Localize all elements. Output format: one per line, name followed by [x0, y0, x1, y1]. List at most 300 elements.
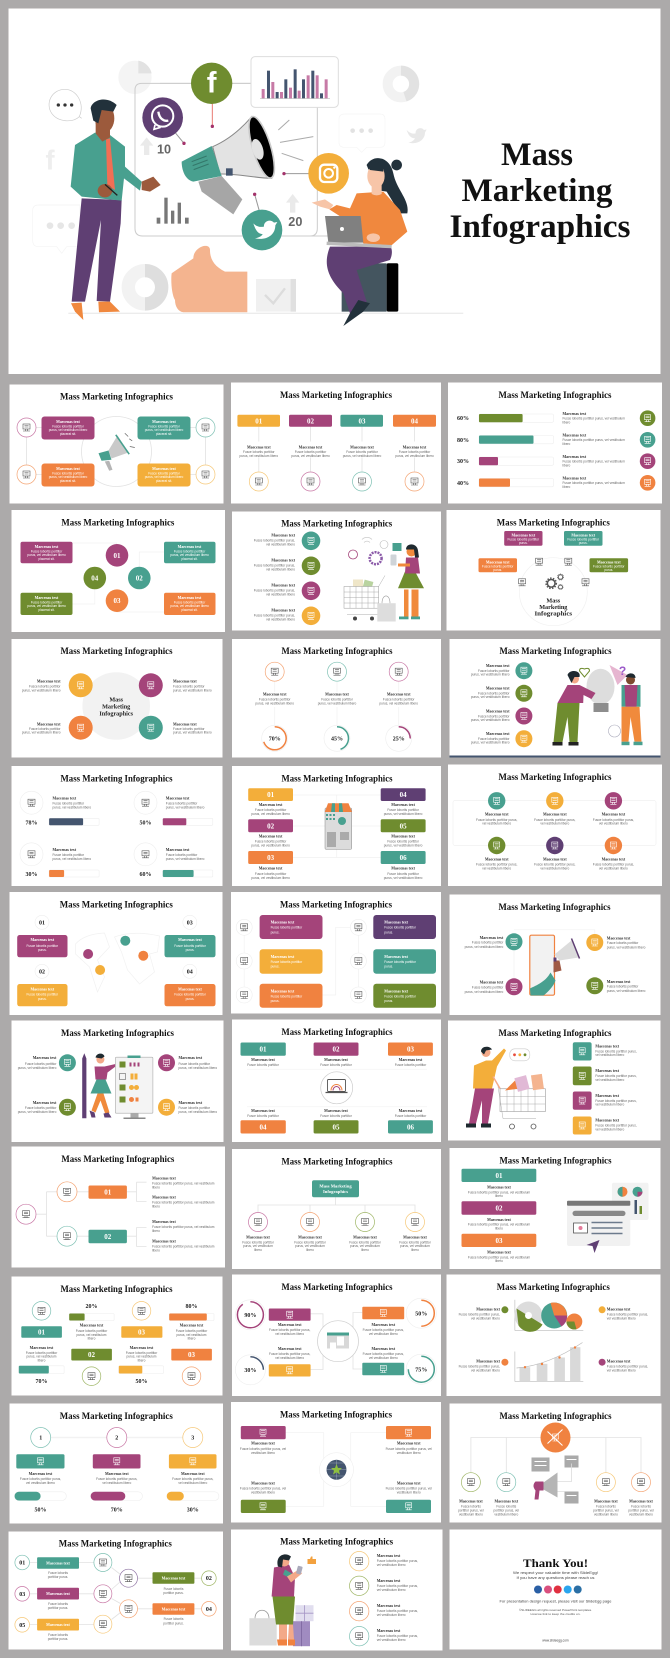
box: top left: Maecenas text [56, 420, 81, 424]
message [513, 1570, 598, 1580]
box 02: Fusce lobortis porttitor [255, 840, 287, 844]
header 05: Fusce lobortis porttitor [320, 1114, 353, 1118]
hub circle: Marketing [102, 704, 131, 710]
block 01: Maecenas text [487, 1185, 512, 1189]
list item 3 [573, 1092, 637, 1110]
item 5 [534, 837, 576, 870]
column 70%: 70% [269, 736, 281, 742]
item 50% [134, 791, 213, 826]
box 01: Maecenas text [259, 803, 283, 807]
panel: slide 6 gears [446, 510, 660, 630]
box 04: Fusce lobortis porttitor [387, 808, 420, 812]
item 75% [362, 1347, 436, 1384]
item 01: Fusce lobortis porttitor [27, 944, 59, 948]
text 3: Maecenas text [152, 1220, 176, 1224]
item left top: Fusce lobortis porttitor [25, 1062, 57, 1066]
heading: Mass Marketing Infographics [280, 900, 392, 911]
item 6 [593, 837, 634, 870]
heading: Mass Marketing Infographics [282, 1282, 393, 1293]
step 1: Maecenas text [29, 1472, 53, 1476]
block 02: 02 [496, 1205, 503, 1213]
text bottom left: Maecenas text [37, 722, 61, 726]
item 90% [235, 1300, 311, 1336]
text 4 [152, 1240, 215, 1252]
item 90%: 90% [244, 1313, 256, 1319]
item top left: Fusce lobortis porttitor purus, [459, 1312, 500, 1316]
list item 2: purus, vel vestibulum libero [471, 695, 510, 699]
hero title: Marketing [462, 173, 613, 209]
column 02: 20% [86, 1304, 98, 1310]
list item 4: Fusce lobortis porttitor purus, [377, 1634, 418, 1638]
item right bottom: purus, vel vestibulum libero [178, 1110, 217, 1114]
node 2: vestibulum libero [494, 1512, 518, 1516]
row 40% [457, 475, 655, 491]
box: top left: purus, vel vestibulum libero [49, 428, 88, 432]
item circles [69, 673, 163, 740]
item right top: Fusce lobortis porttitor [178, 1062, 211, 1066]
item 03: purus. [186, 948, 195, 952]
box 01: purus, vel vestibulum libero [251, 812, 290, 816]
item 78%: Fusce lobortis porttitor [52, 801, 85, 805]
heading: Mass Marketing Infographics [61, 1154, 175, 1165]
text 3 [152, 1220, 215, 1233]
center label: Marketing [539, 604, 568, 611]
item right bottom: purus, vel vestibulum libero [607, 989, 646, 993]
list item 3 [350, 1602, 418, 1621]
box: bottom right: Fusce lobortis porttitor [174, 600, 206, 604]
node 2: Maecenas text [494, 1500, 519, 1504]
item right top: purus, vel vestibulum libero [178, 1066, 217, 1070]
box 06: Maecenas text [391, 867, 416, 871]
column 45%: Fusce lobortis porttitor [321, 697, 354, 701]
header 06: 06 [407, 1124, 414, 1132]
block 02 [462, 1201, 536, 1230]
column 03: 03 [138, 1328, 146, 1336]
row 30%: Maecenas text [562, 455, 587, 459]
box: top right [164, 542, 216, 563]
item top right [599, 1306, 648, 1320]
list item 2 [254, 556, 320, 575]
row 40%: libero [562, 485, 571, 489]
list item 1: Maecenas text [486, 664, 510, 668]
social icons [534, 1586, 582, 1594]
box: bottom right: purus, vel vestibulum libero [170, 604, 209, 608]
column 01: purus, vel vestibulum libero [239, 454, 278, 458]
step 1: 50% [34, 1508, 46, 1514]
node 3: purus, vel vestibulum [350, 1244, 380, 1248]
boxes: Fusce lobortis porttitor [508, 538, 540, 542]
panel: slide 14 six boxes [231, 892, 441, 1014]
heading: Mass Marketing Infographics [60, 1284, 173, 1295]
box 3 [478, 558, 517, 572]
list item 2: vel vestibulum libero [377, 1588, 406, 1592]
column 03: purus, vel vestibulum [127, 1354, 157, 1358]
heading: Mass Marketing Infographics [498, 772, 612, 783]
item top left: Maecenas text [476, 1308, 501, 1312]
box 5: Fusce lobortis porttitor [384, 960, 417, 964]
list item 4: Maecenas text [595, 1119, 620, 1123]
legal text: ©SLIDEEGG all rights reserved PowerPoint templates. [519, 1608, 592, 1612]
pie charts [514, 1300, 583, 1332]
item 50%: 50% [140, 820, 152, 826]
panel: slide 19 tree branches [12, 1146, 225, 1268]
row 05: Fusce lobortis [48, 1633, 68, 1637]
heading: Mass Marketing Infographics [498, 1028, 612, 1039]
item 4: Fusce lobortis porttitor purus, [476, 862, 517, 866]
list item 3: Maecenas text [595, 1094, 620, 1098]
block 03: Fusce lobortis porttitor purus, vel vestibulum [468, 1255, 531, 1259]
node 3 [349, 1212, 382, 1252]
item 50%: Fusce lobortis porttitor [166, 801, 198, 805]
list item 2: Maecenas text [486, 687, 510, 691]
item 1: Maecenas text [485, 812, 509, 816]
row 01 [15, 1554, 112, 1579]
box 3: Maecenas text [271, 989, 295, 993]
node 3: Maecenas text [353, 1235, 378, 1239]
item 90%: Maecenas text [278, 1323, 302, 1327]
hub circle [82, 672, 150, 740]
box 04 [381, 788, 426, 816]
item 90%: vel vestibulum libero [275, 1332, 304, 1336]
ground line [68, 312, 463, 315]
icon: instagram circle [282, 153, 349, 194]
column 03: Maecenas text [350, 446, 375, 450]
node 1: Fusce lobortis porttitor [242, 1240, 275, 1244]
step 2: Fusce lobortis porttitor purus, [96, 1477, 138, 1481]
box 3: Fusce lobortis porttitor [271, 994, 303, 998]
item right top: purus, vel vestibulum libero [607, 946, 646, 950]
node 4: libero [411, 1248, 419, 1252]
list item 3: vel vestibulum libero [595, 1103, 625, 1107]
column 01: Maecenas text [30, 1346, 54, 1350]
heading: Mass Marketing Infographics [60, 1411, 173, 1422]
node 3: Fusce lobortis [596, 1504, 616, 1508]
node 4: vestibulum libero [629, 1512, 653, 1516]
panel: slide 2 numbered columns [231, 382, 441, 504]
item 50%: purus, vel vestibulum libero [166, 805, 205, 809]
block 01 [462, 1169, 536, 1198]
column 03: Fusce lobortis porttitor [126, 1351, 158, 1355]
box: bottom right: Fusce lobortis porttitor [148, 472, 181, 476]
row 05 [15, 1615, 112, 1641]
box bottom left: Fusce lobortis porttitor purus, vel [240, 1487, 286, 1491]
number circles: 03 [114, 597, 121, 605]
node 2 [494, 1473, 519, 1516]
step 2: 70% [111, 1508, 123, 1514]
list item 4 [471, 730, 532, 747]
item 03: Maecenas text [178, 938, 203, 942]
item 03: Fusce lobortis porttitor [174, 944, 207, 948]
box top left: Maecenas text [251, 1442, 276, 1446]
column 04: Fusce lobortis porttitor [399, 450, 431, 454]
heading: Mass Marketing Infographics [59, 1538, 172, 1550]
box top right: Maecenas text [397, 1442, 421, 1446]
item right top [586, 934, 646, 951]
column 01: libero [38, 1358, 46, 1362]
text top right: Fusce lobortis porttitor [173, 685, 205, 689]
item 75%: vel vestibulum libero [369, 1356, 398, 1360]
box 05 [381, 819, 426, 848]
check box [256, 279, 296, 312]
panel: hero slide [8, 8, 660, 374]
column 01: Fusce lobortis porttitor [26, 1351, 58, 1355]
header 01: Maecenas text [251, 1058, 276, 1062]
item 03 [164, 915, 216, 957]
list item 1: Fusce lobortis porttitor purus, [377, 1559, 418, 1563]
heading: Mass Marketing Infographics [281, 518, 392, 530]
box 3: Fusce lobortis porttitor [482, 564, 514, 568]
header 06: Maecenas text [399, 1109, 423, 1113]
heading: Mass Marketing Infographics [280, 1536, 393, 1548]
branch 01: 01 [104, 1189, 112, 1197]
box: bottom right: Maecenas text [152, 467, 177, 471]
hero illustration: chart, megaphone, woman [160, 57, 427, 326]
item 3: Fusce lobortis porttitor purus, [593, 818, 634, 822]
column 02: 02 [307, 418, 314, 426]
box top left: vestibulum libero [251, 1451, 275, 1455]
block 02: Maecenas text [487, 1218, 512, 1222]
connectors [259, 426, 414, 472]
text bottom right [173, 722, 212, 735]
item right bottom: Maecenas text [607, 980, 631, 984]
icon: pale donut top right [388, 71, 414, 97]
heading: Mass Marketing Infographics [60, 646, 173, 657]
item 1: Fusce lobortis porttitor purus, [476, 818, 517, 822]
hub circle: Mass [109, 697, 124, 704]
node 4: Fusce lobortis porttitor [399, 1240, 432, 1244]
box 04: 04 [400, 791, 407, 799]
center label: Infographics [535, 610, 573, 618]
item 5: Maecenas text [543, 858, 567, 862]
item left bottom: Fusce lobortis porttitor [25, 1106, 57, 1110]
text bottom left: purus, vel vestibulum libero [22, 731, 61, 735]
box 06: purus, vel vestibulum libero [384, 876, 423, 880]
node 1 [458, 1473, 484, 1516]
box 2 [236, 949, 322, 974]
icon: up arrow with 10: 10 [157, 143, 171, 157]
list item 3: Maecenas text [486, 709, 510, 713]
list item 4: Maecenas text [486, 732, 510, 736]
item 04: Fusce lobortis porttitor [174, 992, 207, 996]
text 2: Maecenas text [152, 1196, 176, 1200]
row 03: porttitor purus. [48, 1606, 68, 1610]
list item 4 [573, 1116, 637, 1134]
heading: Mass Marketing Infographics [497, 1282, 610, 1293]
row 01: Fusce lobortis [48, 1571, 68, 1575]
step 1: vel vestibulum libero [26, 1481, 55, 1485]
item right bottom: Fusce lobortis porttitor [178, 1106, 211, 1110]
node 3: porttitor purus, vel [593, 1508, 619, 1512]
row 80%: 80% [457, 438, 469, 444]
text top right: purus, vel vestibulum libero [173, 688, 212, 692]
box 02: purus, vel vestibulum libero [251, 844, 290, 848]
list item 1 [471, 662, 532, 679]
box 2: Maecenas text [271, 955, 295, 959]
box: top right [138, 416, 190, 440]
item 30%: vel vestibulum libero [275, 1356, 304, 1360]
node 4: purus, vel vestibulum [400, 1244, 430, 1248]
box 06: Fusce lobortis porttitor [387, 872, 420, 876]
box: bottom right: Maecenas text [178, 596, 202, 600]
node 1: vestibulum libero [459, 1512, 483, 1516]
panel: slide 28 network flow [8, 1532, 223, 1650]
column 70%: purus, vel vestibulum libero [255, 701, 294, 705]
panel: slide 4 four numbered circles [12, 510, 225, 632]
row 80%: Fusce lobortis porttitor purus, vel vestibulum [562, 438, 625, 442]
item right top [158, 1054, 217, 1071]
row 02: porttitor purus. [163, 1591, 184, 1595]
illustration: woman [90, 1054, 116, 1118]
box 4: purus. [604, 568, 613, 572]
panel frame [135, 83, 363, 236]
box 02: 02 [267, 822, 275, 830]
item 30%: 30% [26, 872, 38, 878]
block 02: libero [495, 1226, 503, 1230]
box: bottom left: purus, vel vestibulum libero [27, 604, 66, 608]
list item 3: Maecenas text [377, 1604, 401, 1608]
box 4: purus. [384, 930, 393, 934]
header 04: Maecenas text [251, 1109, 276, 1113]
heading: Mass Marketing Infographics [498, 390, 612, 401]
step 2: Maecenas text [105, 1472, 129, 1476]
item 04: Maecenas text [178, 987, 203, 991]
item 30%: Maecenas text [52, 848, 77, 852]
box 6 [350, 984, 436, 1008]
item 01: Maecenas text [30, 938, 55, 942]
box 04: Maecenas text [391, 803, 416, 807]
box 04: purus, vel vestibulum libero [384, 812, 423, 816]
box: bottom left: Maecenas text [56, 467, 81, 471]
item 02: Fusce lobortis porttitor [27, 992, 59, 996]
list item 3: Fusce lobortis porttitor purus, [595, 1099, 637, 1103]
row 03 [15, 1585, 112, 1610]
item right top: Maecenas text [607, 936, 631, 940]
row 60%: Fusce lobortis porttitor purus, vel vestibulum [562, 416, 625, 420]
text top left [22, 680, 61, 692]
header 04: Fusce lobortis porttitor [247, 1114, 280, 1118]
list item 2 [471, 685, 532, 702]
node 4: Fusce lobortis [631, 1504, 651, 1508]
header 05: Maecenas text [324, 1109, 349, 1113]
item top left: vel vestibulum libero [471, 1316, 500, 1320]
list item 1: Fusce lobortis porttitor [478, 669, 510, 673]
box 03 [248, 851, 293, 880]
world map outline [76, 933, 160, 992]
list item 4 [350, 1626, 418, 1646]
row 80%: libero [562, 442, 571, 446]
box: bottom left: Fusce lobortis porttitor [31, 600, 63, 604]
row 03: Maecenas text [46, 1592, 71, 1596]
item bottom right: Maecenas text [607, 1360, 631, 1364]
item 04: purus. [186, 997, 195, 1001]
illustration: team with bulb: ? [619, 664, 626, 678]
block 03: 03 [496, 1237, 503, 1245]
icon: facebook circle [191, 63, 232, 128]
list items: Maecenas text [271, 534, 296, 538]
column 04: Maecenas text [180, 1324, 204, 1328]
boxes: Maecenas text [511, 534, 536, 538]
illustration: woman with cart [344, 537, 424, 622]
list item 4: Maecenas text [377, 1629, 401, 1633]
text top left: Maecenas text [37, 680, 61, 684]
column 01: 70% [36, 1379, 48, 1385]
icon: pale chat bubble right [339, 114, 385, 152]
panel: slide 9 bulb team [450, 639, 660, 758]
column 45%: 45% [331, 736, 343, 742]
text 4: Fusce lobortis porttitor purus, vel vestibulum [152, 1244, 215, 1248]
heading: Mass Marketing Infographics [60, 392, 173, 402]
box 05: purus, vel vestibulum libero [384, 844, 423, 848]
item 2: Fusce lobortis porttitor purus, [534, 818, 576, 822]
list items: Fusce lobortis porttitor purus, [254, 538, 295, 542]
list item 2: Maecenas text [595, 1069, 620, 1073]
row 30%: 30% [457, 459, 469, 465]
connectors [26, 428, 206, 474]
box: top right: placerat sit. [156, 432, 172, 436]
panel: slide 12 six circles [448, 764, 662, 886]
column 01: 01 [38, 1328, 46, 1336]
branch 01 [57, 1182, 127, 1202]
node 2: Maecenas text [298, 1235, 323, 1239]
item 03: 03 [187, 920, 193, 926]
box 5: Maecenas text [384, 955, 409, 959]
list item 4 [254, 606, 320, 625]
item 78%: Maecenas text [52, 796, 77, 800]
item 30% [20, 843, 99, 878]
item 30% [235, 1347, 311, 1385]
step 1: 1 [39, 1436, 42, 1442]
node 1: porttitor purus, vel [458, 1508, 484, 1512]
column 03: 03 [358, 418, 366, 426]
row 02 [120, 1569, 216, 1595]
woman [312, 158, 408, 326]
box 4: Maecenas text [384, 921, 409, 925]
heading: Mass Marketing Infographics [61, 518, 175, 529]
item 30%: Fusce lobortis porttitor [52, 853, 85, 857]
box: top left: placerat sit. [38, 557, 55, 561]
hub [318, 1321, 358, 1362]
panel: slide 10 icon progress [12, 766, 222, 886]
panel: slide 15 phone megaphone [450, 894, 660, 1015]
box: bottom right: placerat sit. [156, 479, 172, 483]
column 02: 02 [88, 1351, 96, 1359]
item 04 [164, 964, 216, 1006]
list items: vel vestibulum libero [266, 542, 295, 546]
panel: slide 26 globe [231, 1402, 441, 1522]
box: top left [20, 542, 72, 563]
item 50%: Fusce lobortis porttitor purus, [363, 1328, 404, 1332]
item 02 [17, 964, 68, 1006]
text top left: purus, vel vestibulum libero [22, 688, 61, 692]
icon: shop building [325, 803, 352, 849]
icon: up arrow with 20: 20 [288, 215, 302, 229]
boxes: purus. [519, 541, 528, 545]
text 1: Fusce lobortis porttitor purus, vel vestibulum [152, 1182, 215, 1186]
list item 2 [350, 1576, 418, 1596]
connectors [293, 795, 381, 858]
item left top: Maecenas text [480, 936, 504, 940]
item 60%: Maecenas text [166, 848, 190, 852]
step 1: Fusce lobortis porttitor purus, [20, 1477, 61, 1481]
box 2: Fusce lobortis porttitor [567, 538, 600, 542]
list items [254, 532, 320, 550]
thumbs up [171, 246, 247, 312]
box: bottom right [164, 593, 216, 615]
box 2: purus. [271, 965, 280, 969]
branch 02: 02 [104, 1233, 112, 1241]
column 04: 03 [188, 1351, 196, 1359]
list item 2: Fusce lobortis porttitor [478, 692, 510, 696]
